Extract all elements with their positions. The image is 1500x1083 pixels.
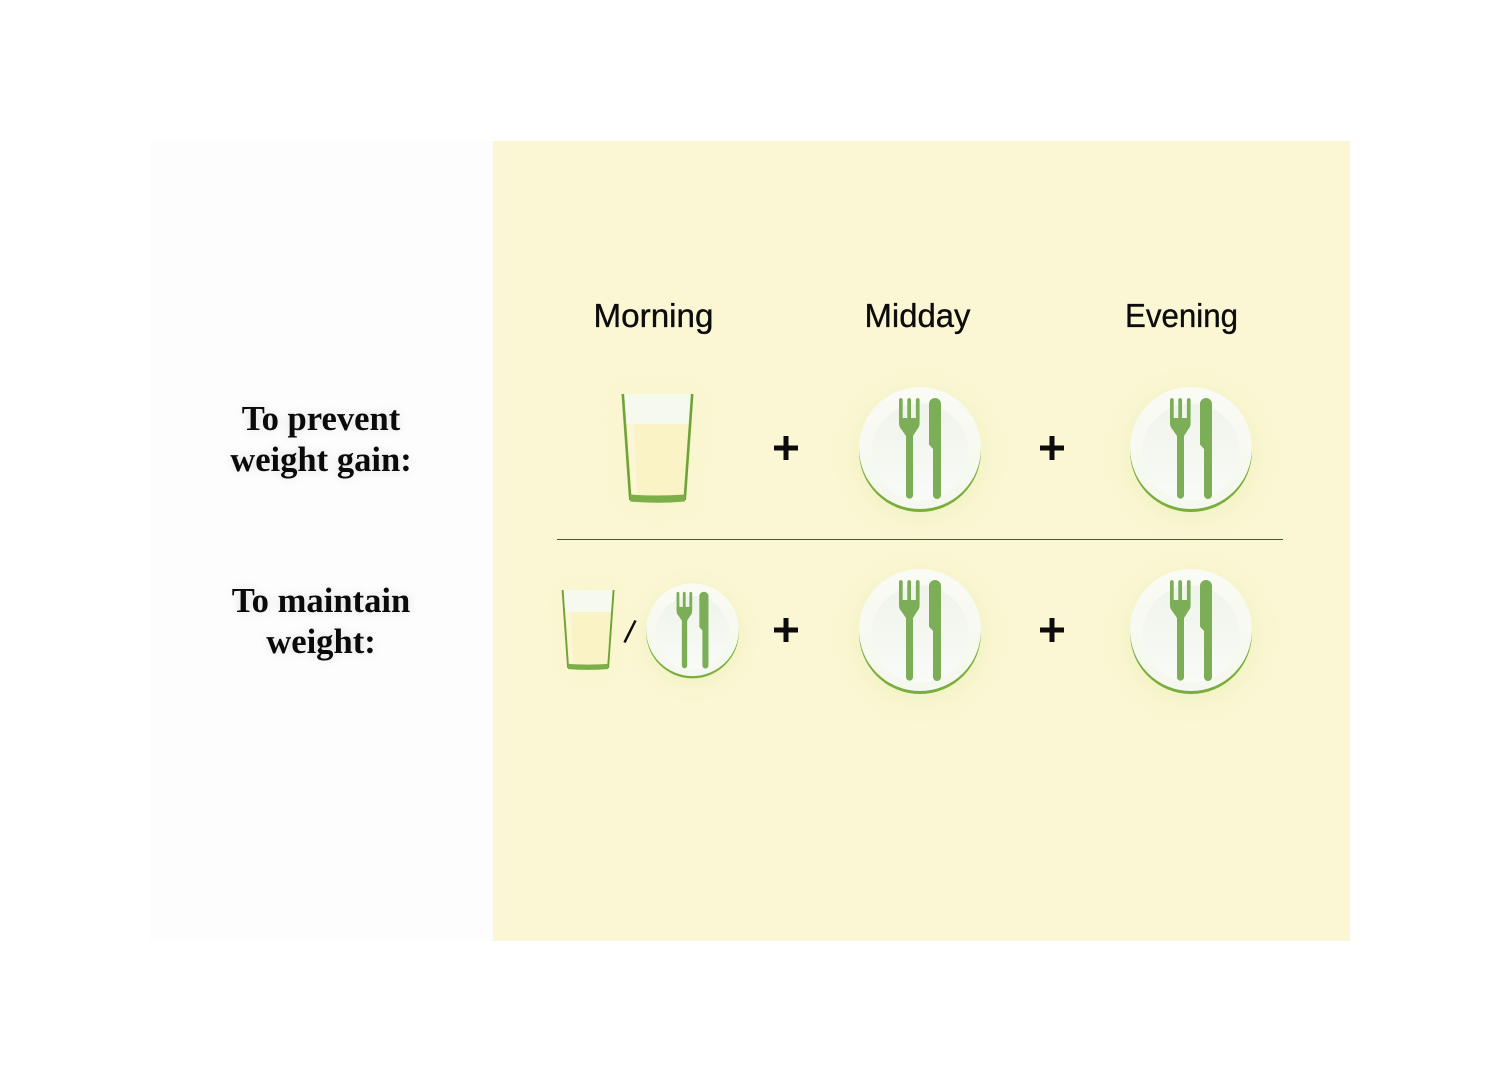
icon: small glass morning bbox=[562, 590, 614, 671]
row label: to prevent weight gain: To prevent bbox=[242, 400, 401, 438]
row label: to maintain weight: weight: bbox=[266, 623, 376, 661]
heading: Midday: Midday bbox=[864, 297, 971, 334]
icon: plate midday bbox=[855, 569, 985, 702]
row label: to maintain weight bbox=[232, 582, 410, 661]
icon: plate evening bbox=[1126, 569, 1256, 702]
row label: to maintain weight: To maintain bbox=[232, 582, 410, 620]
row label: to maintain weight: weight: bbox=[266, 623, 376, 661]
plus sign bbox=[774, 618, 798, 642]
heading: Evening: Evening bbox=[1125, 297, 1238, 334]
icon: plate evening bbox=[1126, 387, 1256, 520]
heading: Morning: Morning bbox=[594, 297, 714, 334]
icon: plate midday bbox=[855, 387, 985, 520]
row label: to prevent weight gain: To prevent bbox=[242, 400, 401, 438]
slash separator bbox=[624, 620, 636, 642]
icon: glass morning bbox=[622, 394, 693, 504]
row label: to prevent weight gain: weight gain: bbox=[230, 441, 412, 479]
row label: to maintain weight: To maintain bbox=[232, 582, 410, 620]
divider line bbox=[557, 539, 1283, 540]
panel: yellow meal grid bbox=[493, 141, 1350, 941]
column headings bbox=[594, 297, 1238, 334]
row: maintain weight meals bbox=[562, 569, 1256, 702]
row label: to prevent weight gain: weight gain: bbox=[230, 441, 412, 479]
icon: small plate morning bbox=[643, 583, 742, 684]
plus sign bbox=[1040, 618, 1064, 642]
plus sign bbox=[774, 436, 798, 460]
panel: left label column bbox=[150, 141, 493, 941]
row label: to prevent weight gain bbox=[230, 400, 412, 479]
row: prevent weight gain meals bbox=[622, 387, 1256, 520]
plus sign bbox=[1040, 436, 1064, 460]
